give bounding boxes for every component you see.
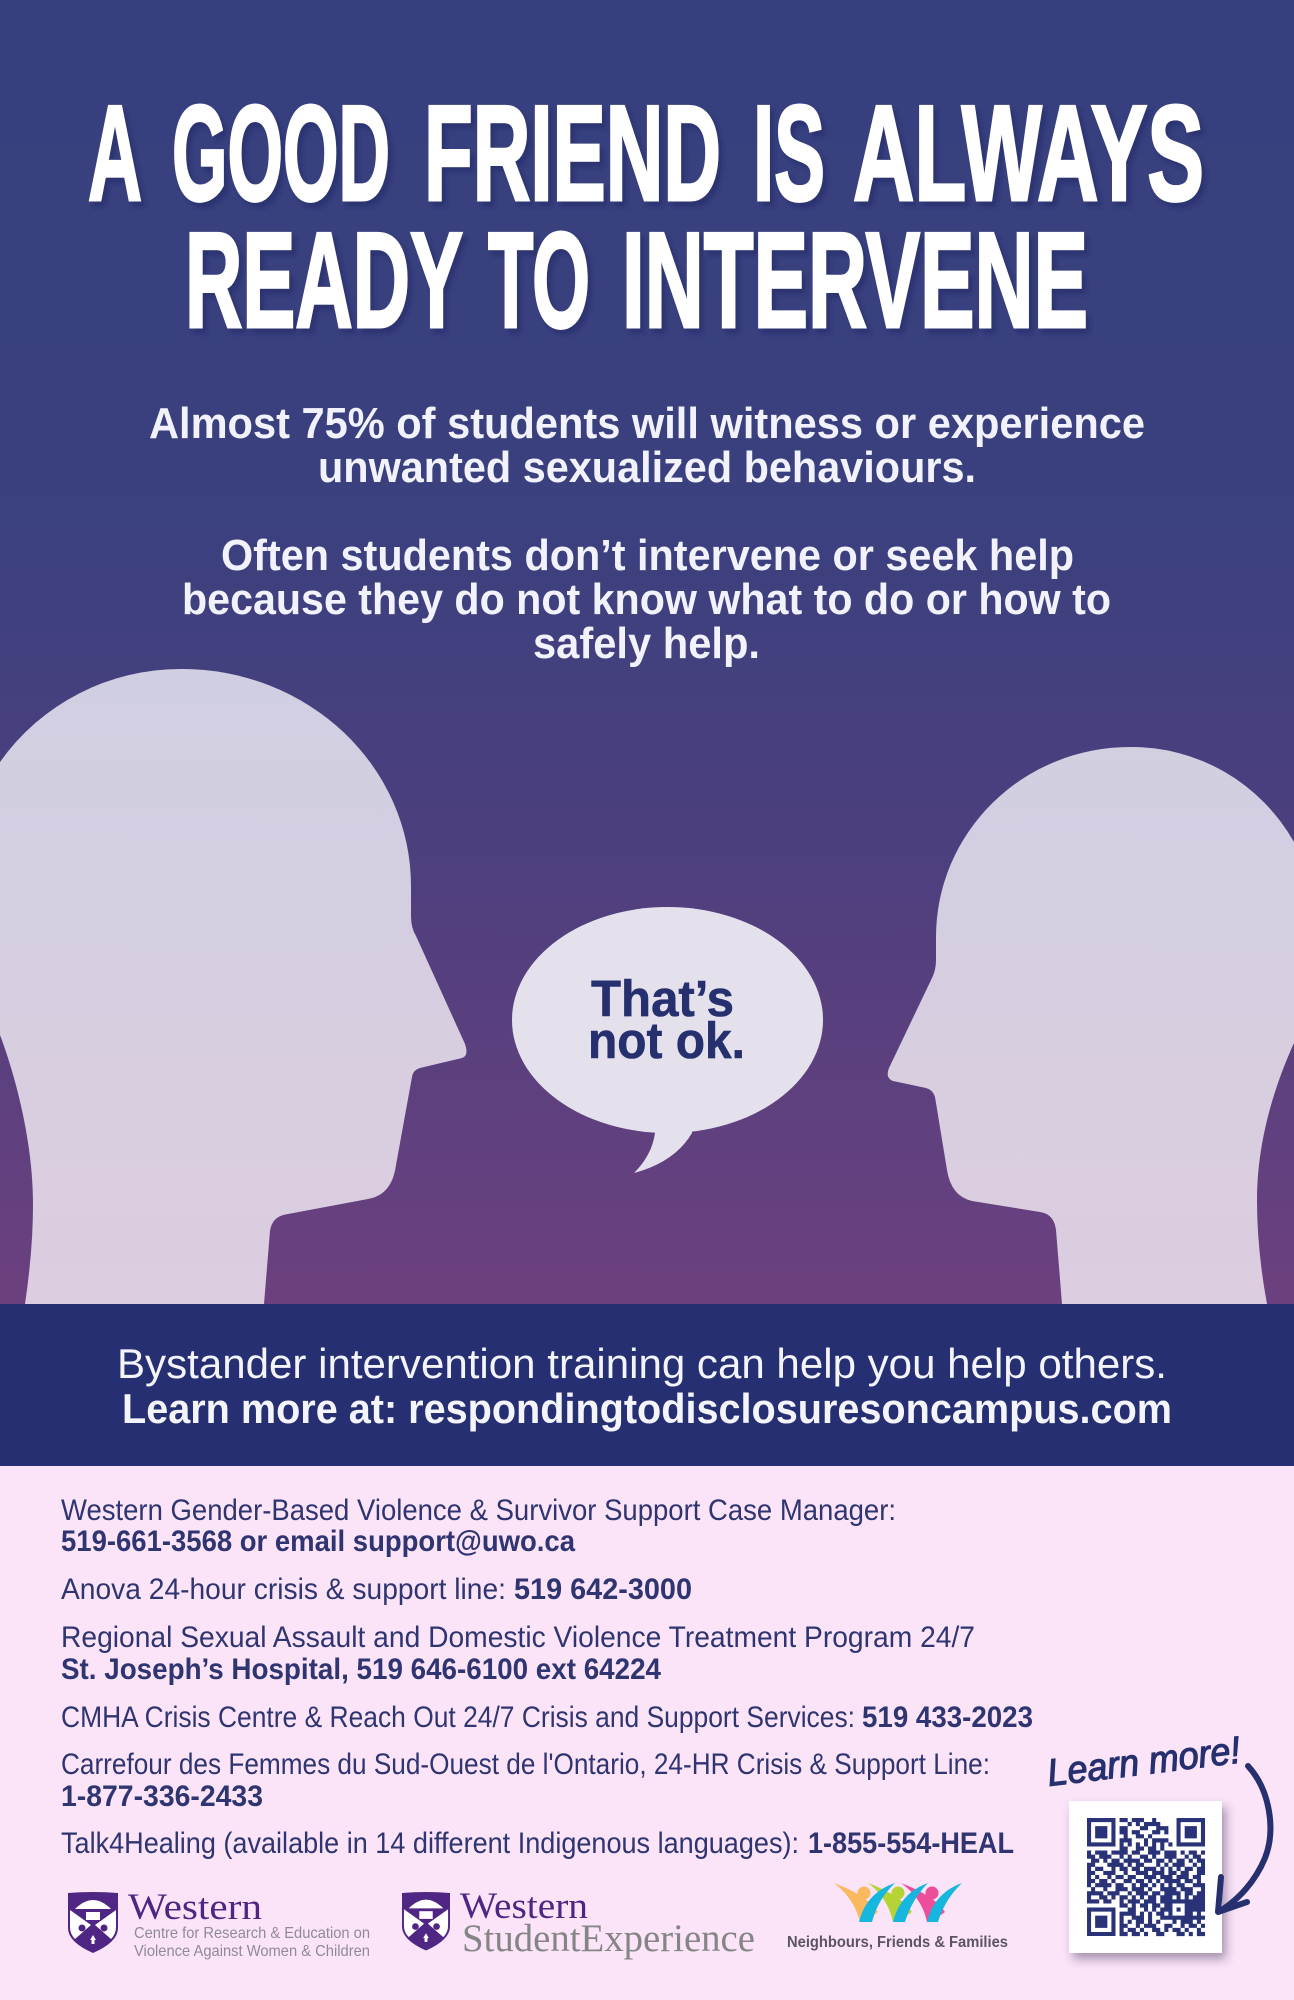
icon: right head silhouette [888,747,1294,1304]
text block: why students don't intervene [182,531,1111,668]
QR code [1069,1801,1222,1953]
title [88,77,1204,356]
logo: Western Student Experience [402,1886,755,1960]
text block: Western case manager: 519-661-3568 or email support@uwo.ca [61,1525,575,1558]
panel: support resources [0,1466,1294,2000]
title: IS [753,77,825,229]
logo: Western Centre for Research & Education [68,1887,370,1960]
panel: training band: Learn more at: respondingtodisclosuresoncampus.com [122,1385,1172,1432]
text block: why students don't intervene: because they do not know what to do or how to [182,575,1111,624]
text block: Anova: 519 642-3000 [514,1573,692,1606]
title: GOOD [172,77,390,229]
text block: statistic [149,399,1145,492]
panel: training band [0,1304,1294,1466]
text block: Regional treatment program: Regional Sexual Assault and Domestic Violence Treatment Program 24/7 [61,1621,975,1654]
logo: Western Student Experience: StudentExperience [462,1917,755,1960]
text block: Carrefour des Femmes: Carrefour des Femmes du Sud-Ouest de l'Ontario, 24-HR Crisis & Support Line: [61,1748,990,1781]
handwritten label: Learn more: Learn more! [1045,1730,1243,1795]
text block: Anova: Anova 24-hour crisis & support line: [61,1573,506,1606]
text block: Western case manager: Western Gender-Based Violence & Survivor Support Case Manager: [61,1494,896,1527]
arrow to QR code [1218,1766,1270,1912]
title: READY [185,204,463,356]
icon: left head silhouette [0,669,466,1304]
logo: Neighbours, Friends & Families [787,1883,1008,1951]
logo: Western Centre for Research & Education: Western [128,1887,262,1928]
text block: Western case manager [61,1494,896,1558]
logo: Western Centre for Research & Education: Centre for Research & Education on [134,1925,370,1942]
text block: statistic: Almost 75% of students will witness or experience [149,399,1145,448]
title: A [88,77,142,229]
text block: CMHA: CMHA Crisis Centre & Reach Out 24/7 Crisis and Support Services: [61,1701,855,1734]
callout: speech bubble [512,907,823,1173]
text block: Carrefour des Femmes [61,1748,990,1813]
text block: Talk4Healing: Talk4Healing (available in 14 different Indigenous languages): [61,1827,799,1860]
logo: Western Centre for Research & Education: Violence Against Women & Children [134,1943,370,1960]
callout: speech bubble: not ok. [588,1012,745,1069]
title: FRIEND [424,77,721,229]
title: TO [488,204,590,356]
text block: CMHA: 519 433-2023 [862,1701,1033,1734]
callout: speech bubble: That’s [591,970,734,1027]
panel: training band: Bystander intervention training can help you help others. [117,1340,1167,1387]
logo: Neighbours, Friends & Families: Neighbours, Friends & Families [787,1934,1008,1951]
text block: Regional treatment program: St. Joseph’s Hospital, 519 646-6100 ext 64224 [61,1653,661,1686]
text block: Carrefour des Femmes: 1-877-336-2433 [61,1780,263,1813]
panel: gradient background [0,0,1294,1304]
text block: why students don't intervene: Often students don’t intervene or seek help [221,531,1074,580]
text block: Regional treatment program [61,1621,975,1686]
text block: statistic: unwanted sexualized behaviours. [318,443,976,492]
logo: Western Student Experience: Western [460,1886,588,1927]
text block: Talk4Healing: 1-855-554-HEAL [808,1827,1014,1860]
text block: why students don't intervene: safely help. [533,619,760,668]
